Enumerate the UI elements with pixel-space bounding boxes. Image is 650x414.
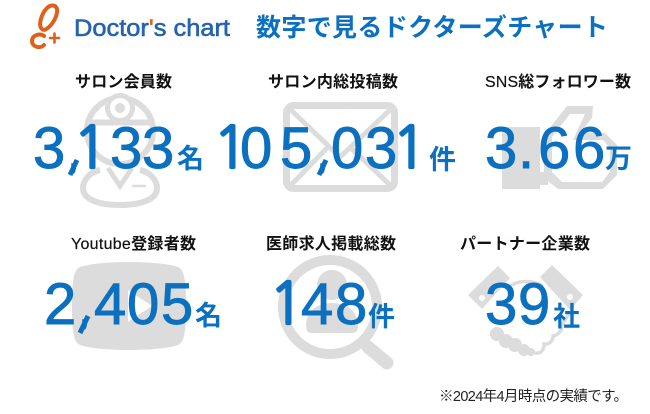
title: 数字で見るドクターズチャート bbox=[256, 13, 608, 42]
unit: 件 bbox=[429, 138, 456, 177]
footnote: ※2024年4月時点の実績です。 bbox=[439, 388, 628, 405]
logo wordmark: Doctor's chart bbox=[74, 15, 230, 42]
unit: 件 bbox=[368, 295, 395, 334]
logo mark bbox=[32, 5, 59, 47]
logo bbox=[32, 5, 230, 47]
label: サロン内総投稿数 bbox=[268, 72, 398, 91]
icon: video play bbox=[72, 262, 186, 350]
stat: SNS followers bbox=[485, 73, 632, 189]
label: Youtube登録者数 bbox=[71, 234, 196, 253]
number: 05 bbox=[240, 116, 312, 181]
label: 医師求人掲載総数 bbox=[266, 234, 396, 253]
unit: 名 bbox=[195, 294, 222, 333]
number: 39 bbox=[485, 272, 550, 337]
number bbox=[44, 272, 193, 337]
number bbox=[213, 116, 427, 181]
number: 1 bbox=[73, 119, 108, 177]
label: パートナー企業数 bbox=[460, 234, 590, 253]
number: 1 bbox=[269, 275, 304, 333]
number: 1 bbox=[213, 119, 248, 177]
number: , bbox=[79, 289, 90, 333]
icon: handshake bbox=[468, 265, 583, 356]
number: , bbox=[68, 133, 79, 177]
number: 33 bbox=[110, 116, 174, 181]
number: 405 bbox=[94, 272, 193, 337]
unit: 万 bbox=[605, 137, 632, 176]
icon: doctor bbox=[83, 93, 157, 205]
stat: partner companies bbox=[460, 234, 590, 356]
unit: 名 bbox=[177, 137, 204, 176]
number: 2 bbox=[44, 272, 76, 337]
icon: envelope bbox=[286, 106, 394, 188]
number: 3.66 bbox=[485, 116, 605, 181]
icon: magnifier with person bbox=[283, 260, 387, 363]
number bbox=[33, 116, 174, 181]
number: , bbox=[317, 133, 328, 177]
number: 3 bbox=[33, 116, 65, 181]
stat: salon members bbox=[33, 73, 204, 205]
number: 03 bbox=[331, 116, 397, 181]
stat: salon posts bbox=[213, 72, 456, 188]
stat: job listings bbox=[266, 234, 396, 363]
unit: 社 bbox=[553, 295, 580, 334]
number: 1 bbox=[392, 119, 427, 177]
stat: Youtube subscribers bbox=[44, 234, 222, 350]
icon: thumbs up bbox=[502, 106, 617, 189]
number: 48 bbox=[301, 272, 367, 337]
label: サロン会員数 bbox=[75, 73, 172, 91]
label: SNS総フォロワー数 bbox=[485, 73, 631, 91]
